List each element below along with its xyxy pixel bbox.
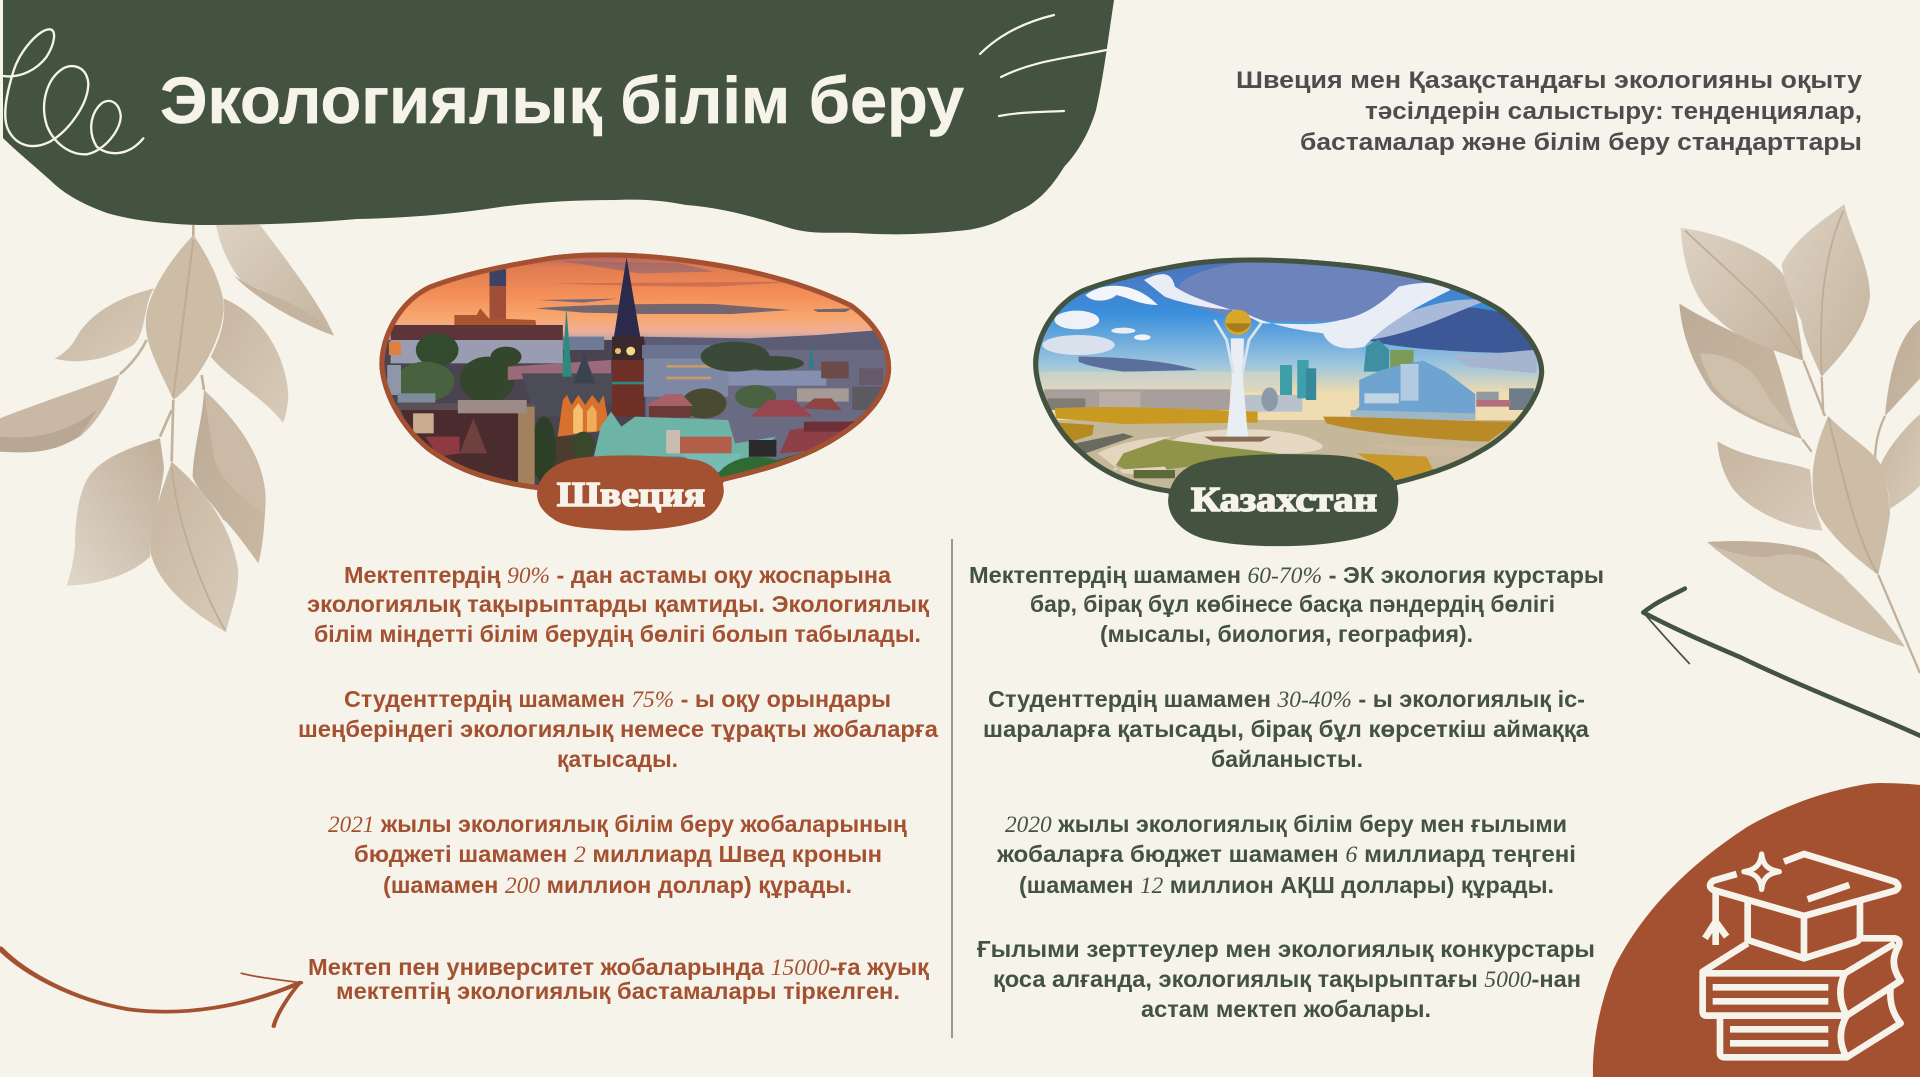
treelines bbox=[1054, 407, 1258, 424]
Sweden paragraph 2: Студенттердің шамамен 75% - ы оқу орындары bbox=[344, 686, 891, 712]
foreground houses left bbox=[398, 403, 535, 423]
Kazakhstan paragraph 3: 2020 жылы экологиялық білім беру мен ғылыми bbox=[1005, 811, 1567, 837]
Sweden paragraph 1 bbox=[307, 562, 930, 647]
heading title: Экологиялық білім беру bbox=[160, 63, 964, 137]
teal roofs bbox=[594, 412, 776, 460]
divider bbox=[951, 539, 953, 1038]
brown corner shape bbox=[1593, 783, 1920, 1077]
scribble: strokes bbox=[980, 15, 1106, 116]
subtitle: бастамалар және білім беру стандарттары bbox=[1300, 129, 1862, 156]
plaza bbox=[1168, 429, 1323, 453]
left tower bbox=[490, 269, 506, 319]
Kazakhstan paragraph 4: астам мектеп жобалары. bbox=[1141, 996, 1431, 1022]
upper book bbox=[1703, 938, 1901, 1016]
panel: Sweden photo bbox=[379, 252, 892, 490]
bottom edge strip bbox=[0, 1077, 1920, 1080]
Kazakhstan paragraph 4 bbox=[977, 936, 1595, 1022]
Sweden paragraph 4: Мектеп пен университет жобаларында 15000-ға жуық bbox=[308, 954, 930, 980]
Kazakhstan paragraph 1 bbox=[969, 562, 1604, 647]
foreground trees bbox=[718, 450, 819, 484]
glass complex bbox=[1364, 339, 1389, 372]
Kazakhstan paragraph 4: Ғылыми зерттеулер мен экологиялық конкурстары bbox=[977, 936, 1595, 962]
Sweden paragraph 1: экологиялық тақырыптарды қамтиды. Экологиялық bbox=[307, 591, 930, 617]
pink roof bbox=[646, 394, 693, 406]
sparkle bbox=[1744, 854, 1779, 889]
Kazakhstan paragraph 3: жобаларға бюджет шамамен 6 миллиард теңгені bbox=[996, 841, 1576, 867]
grey apartment blocks bbox=[644, 358, 728, 397]
panel: Kazakhstan photo bbox=[1033, 258, 1544, 494]
text column: Sweden bbox=[298, 562, 938, 1004]
subtitle: тәсілдерін салыстыру: тенденциялар, bbox=[1365, 98, 1862, 125]
cap side bbox=[1748, 902, 1860, 958]
Sweden paragraph 3: (шамамен 200 миллион доллар) құрады. bbox=[383, 872, 852, 898]
tassel bbox=[1705, 892, 1727, 945]
cap top bbox=[1710, 854, 1898, 916]
label pill: Казахстан bbox=[1168, 454, 1398, 546]
Kazakhstan paragraph 1: (мысалы, биология, география). bbox=[1100, 621, 1473, 647]
Sweden paragraph 1: білім міндетті білім берудің бөлігі болып табылады. bbox=[314, 621, 921, 647]
arrow: green pointing to Kazakhstan text bbox=[1643, 589, 1920, 736]
text column: Kazakhstan bbox=[969, 562, 1604, 1022]
Kazakhstan paragraph 1: бар, бірақ бұл көбінесе басқа пәндердің бөлігі bbox=[1030, 591, 1555, 617]
Kazakhstan paragraph 3 bbox=[996, 811, 1576, 898]
scribble: loops bbox=[3, 29, 143, 154]
Sweden paragraph 2 bbox=[298, 686, 938, 772]
Sweden paragraph 3: бюджеті шамамен 2 миллиард Швед кронын bbox=[354, 841, 882, 867]
decorative leaves: right branch bbox=[1679, 204, 1920, 673]
label pill: Казахстан: Казахстан bbox=[1191, 480, 1377, 519]
Sweden paragraph 4: мектептің экологиялық бастамалары тіркелген. bbox=[336, 978, 900, 1004]
Kazakhstan paragraph 3: (шамамен 12 миллион АҚШ доллары) құрады. bbox=[1019, 872, 1554, 898]
Sweden paragraph 2: шеңберіндегі экологиялық немесе тұрақты жобаларға bbox=[298, 716, 938, 742]
subtitle: Швеция мен Қазақстандағы экологияны оқыту bbox=[1236, 67, 1862, 94]
cap tab bbox=[1808, 885, 1849, 899]
Bayterek tower bbox=[1227, 338, 1248, 437]
label pill: Швеция bbox=[537, 455, 724, 531]
glowing church front bbox=[558, 395, 608, 437]
ground bbox=[1051, 420, 1522, 494]
decorative leaves: top left branch bbox=[0, 225, 334, 632]
small teal spire bbox=[562, 307, 572, 377]
Sweden paragraph 1: Мектептердің 90% - дан астамы оқу жоспарына bbox=[344, 562, 891, 588]
header blob bbox=[3, 0, 1114, 234]
label pill: Швеция: Швеция bbox=[557, 475, 705, 514]
icon: graduation cap on books bbox=[1703, 854, 1901, 1057]
arrow: brown pointing to Sweden text bbox=[0, 948, 300, 1027]
Kazakhstan paragraph 1: Мектептердің шамамен 60-70% - ЭК экология курстары bbox=[969, 562, 1604, 588]
Sweden paragraph 2: қатысады. bbox=[557, 746, 678, 772]
horizon buildings bbox=[1044, 389, 1230, 410]
subtitle bbox=[1236, 67, 1862, 156]
Sweden paragraph 4 bbox=[308, 954, 930, 1004]
Kazakhstan paragraph 2: шараларға қатысады, бірақ бұл көрсеткіш аймаққа bbox=[983, 716, 1589, 742]
red roofs right bbox=[751, 400, 813, 417]
Kazakhstan paragraph 2: Студенттердің шамамен 30-40% - ы экологиялық іс- bbox=[988, 686, 1585, 712]
Kazakhstan paragraph 2 bbox=[983, 686, 1589, 772]
Sweden paragraph 3: 2021 жылы экологиялық білім беру жобаларының bbox=[328, 811, 907, 837]
Kazakhstan paragraph 4: қоса алғанда, экологиялық тақырыптағы 5000-нан bbox=[993, 966, 1581, 992]
bell tower bbox=[614, 257, 640, 337]
Sweden paragraph 3 bbox=[328, 811, 907, 898]
lower book bbox=[1720, 987, 1901, 1057]
gothic church bbox=[508, 360, 611, 380]
Kazakhstan paragraph 2: байланысты. bbox=[1211, 746, 1363, 772]
